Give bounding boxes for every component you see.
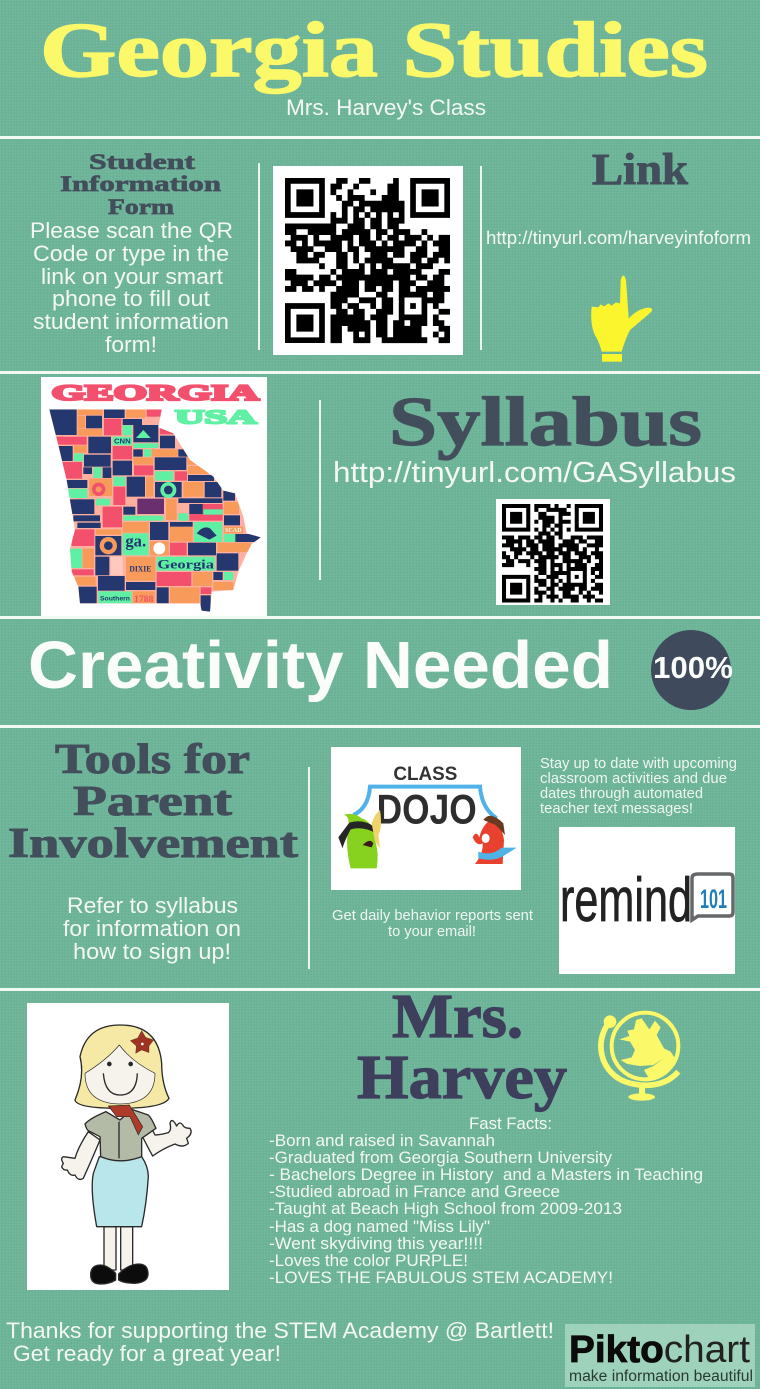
text: fast facts: -Loves the color PURPLE! [269,1252,468,1270]
heading: tools for parent involvement: Parent [73,779,232,825]
text: class dojo description: to your email! [388,923,476,940]
map of colored tiles: ga. [125,532,146,551]
image: cartoon Mrs. Harvey [27,1003,229,1290]
logo: Piktochart [565,1324,755,1387]
map of colored tiles: DIXIE [129,564,151,573]
logo: Remind 101 [559,827,735,974]
text: class dojo description [332,907,534,940]
arms [62,1132,100,1179]
heading: student information form: Information [60,171,221,196]
stat: 100 percent [651,630,733,710]
QR code: syllabus [496,499,610,605]
logo: Class Dojo: DOJO [377,785,477,832]
scarf [108,1105,143,1135]
heading: tools for parent involvement [8,737,298,867]
image: Georgia USA map poster [41,377,267,616]
vertical divider [319,400,321,580]
text: sign up note [63,893,241,964]
face [85,1045,155,1104]
shirt [85,1109,156,1161]
text: fast facts: -Taught at Beach High School from 2009-2013 [269,1200,622,1218]
text: fast facts: -Has a dog named "Miss Lily" [269,1218,490,1236]
section dividers [0,136,760,991]
panel: student information form [30,149,233,357]
text: sign up note: Refer to syllabus [67,893,238,918]
logo: Remind 101: 101 [700,884,727,914]
stat: 100 percent: 100% [653,650,733,685]
instructions text: student information [33,309,229,334]
text: sign up note: how to sign up! [73,939,231,964]
logo: Piktochart: make information beautiful [569,1368,753,1385]
map of colored tiles: Georgia [157,558,215,572]
instructions text: phone to fill out [52,286,210,311]
text: fast facts: -Graduated from Georgia Southern University [269,1149,613,1167]
text: remind description: dates through automated [540,785,703,802]
heading: tools for parent involvement: Involvement [8,821,298,867]
map of colored tiles: SCAD [225,528,242,534]
text: fast facts: - Bachelors Degree in History and a Masters in Teaching [269,1166,703,1184]
heading: Mrs. Harvey: Harvey [357,1044,567,1112]
logo: Class Dojo [331,747,521,890]
text: remind description: teacher text messages! [540,800,693,817]
heading: syllabus: Syllabus [389,384,702,461]
poster heading USA: USA [175,406,258,428]
text: fast facts: Fast Facts: [469,1115,552,1133]
link url: http://tinyurl.com/harveyinfoform [486,227,751,248]
text: class dojo description: Get daily behavior reports sent [332,907,534,924]
text: remind description: Stay up to date with upcoming [540,755,737,772]
text: fast facts [269,1115,703,1287]
instructions text [30,218,233,357]
heading: student information form: Form [108,194,174,219]
map of colored tiles [47,407,267,613]
hair [75,1025,169,1108]
text: remind description [540,755,737,817]
heading: creativity needed: Creativity Needed [28,628,613,703]
footer thanks text: Thanks for supporting the STEM Academy @ Bartlett! [6,1318,554,1343]
instructions text: link on your smart [41,264,223,289]
icon: globe [601,1013,678,1101]
heading: Mrs. Harvey: Mrs. [392,983,523,1051]
map of colored tiles: CNN [114,436,131,445]
heading: tools for parent involvement: Tools for [55,737,250,783]
QR code: student form [273,166,463,355]
logo: Remind 101: remind [560,866,692,935]
logo: Class Dojo: CLASS [393,764,457,785]
text: remind description: classroom activities and due [540,770,727,787]
text: fast facts: -Born and raised in Savannah [269,1132,495,1150]
instructions text: Please scan the QR [30,218,233,243]
subtitle: Mrs. Harvey's Class [286,95,486,120]
legs and shoes [104,1227,133,1270]
heading: Mrs. Harvey [357,983,567,1112]
text: fast facts: -LOVES THE FABULOUS STEM ACADEMY! [269,1269,613,1287]
instructions text: form! [105,332,157,357]
logo: Piktochart: Piktochart [569,1329,750,1371]
instructions text: Code or type in the [33,241,229,266]
skirt [92,1157,148,1227]
text: sign up note: for information on [63,916,241,941]
map of colored tiles: 1788 [134,595,154,605]
text: fast facts: -Studied abroad in France and Greece [269,1183,560,1201]
vertical divider [308,767,310,969]
divider lines [258,163,482,350]
text: fast facts: -Went skydiving this year!!!! [269,1235,483,1253]
syllabus url: http://tinyurl.com/GASyllabus [333,457,736,489]
flower [130,1031,154,1053]
footer thanks text: Get ready for a great year! [13,1341,281,1366]
heading: student information form [60,149,221,219]
poster heading Georgia: GEORGIA [52,380,260,405]
heading: link: Link [592,145,689,194]
title: Georgia Studies [40,6,708,93]
map of colored tiles: Southern [100,596,130,603]
heading: student information form: Student [89,149,196,174]
icon: pointing hand [591,275,652,362]
footer thanks text [6,1318,554,1366]
